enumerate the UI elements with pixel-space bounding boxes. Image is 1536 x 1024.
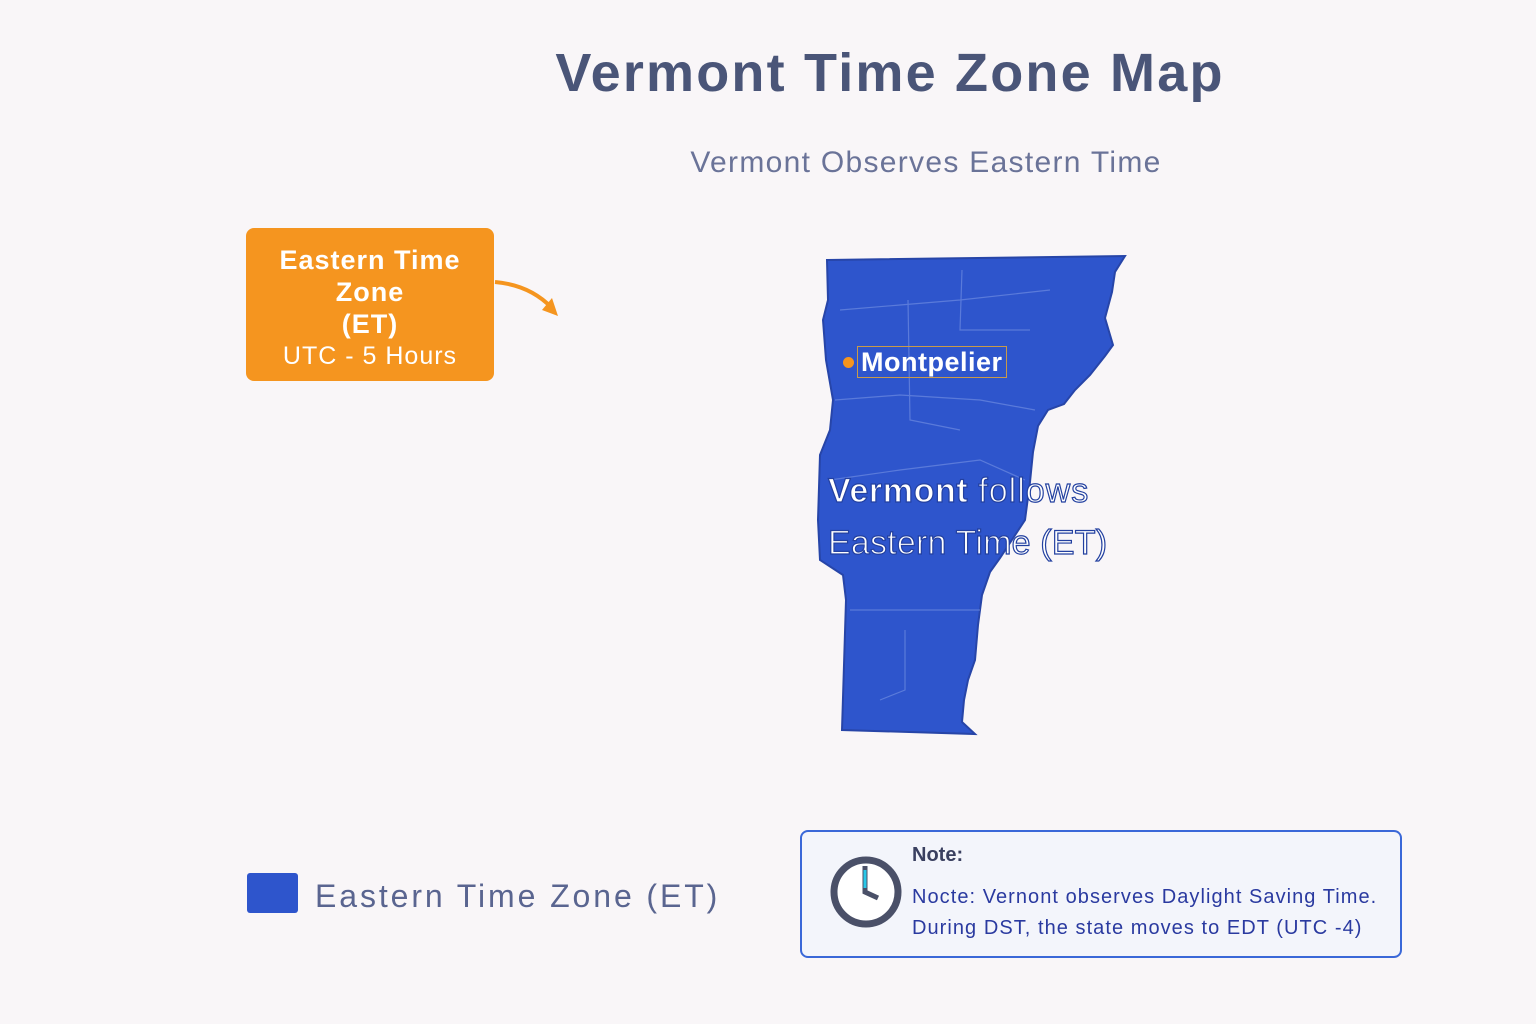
callout: eastern time zone: UTC - 5 Hours	[283, 342, 457, 370]
icon: clock	[830, 856, 902, 928]
city marker: Montpelier: Montpelier	[861, 347, 1003, 377]
legend: Eastern Time Zone (ET)	[315, 878, 720, 914]
callout: eastern time zone: Zone	[336, 277, 404, 307]
map label: Vermont follows	[828, 472, 1089, 510]
callout: eastern time zone: (ET)	[342, 309, 398, 339]
callout: eastern time zone: Eastern Time	[279, 245, 461, 275]
map label: Eastern Time (ET)	[828, 524, 1107, 562]
note text: Note:	[912, 844, 963, 866]
note box: During DST, the state moves to EDT (UTC -4)	[912, 917, 1362, 939]
title: Vermont Time Zone Map	[555, 43, 1225, 103]
note box: Nocte: Vernont observes Daylight Saving Time.	[912, 886, 1377, 908]
note box	[800, 830, 1402, 958]
subtitle: Vermont Observes Eastern Time	[690, 146, 1162, 179]
callout: eastern time zone	[246, 228, 494, 381]
arrow: callout to map	[494, 280, 558, 316]
map label	[828, 472, 1107, 562]
